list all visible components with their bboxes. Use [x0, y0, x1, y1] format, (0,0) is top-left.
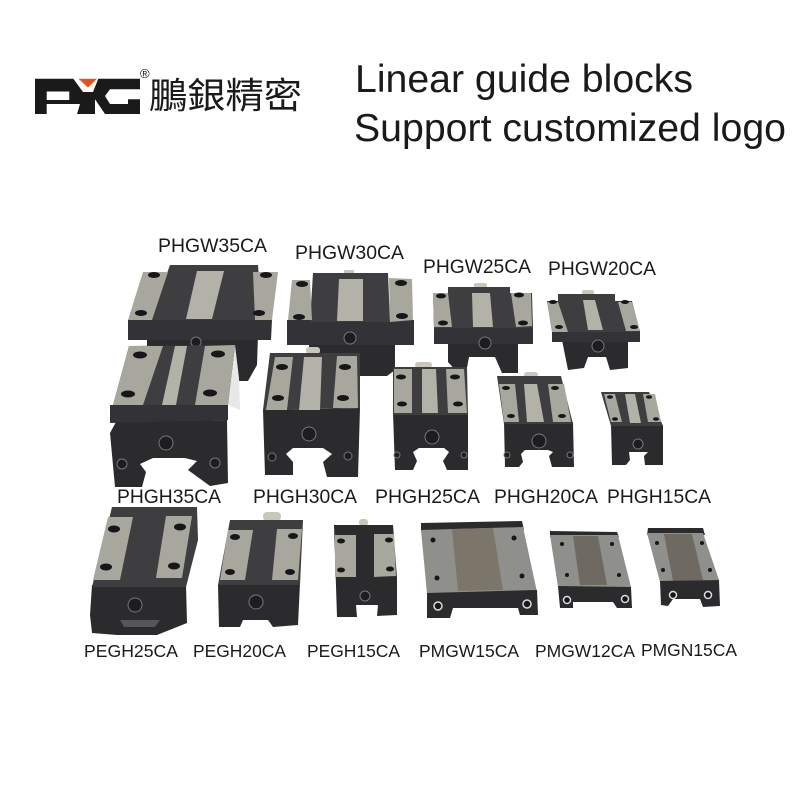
label: PHGH20CA: PHGH20CA [494, 487, 598, 508]
label: PMGN15CA: PMGN15CA [641, 640, 737, 660]
label: PEGH15CA: PEGH15CA [307, 641, 400, 661]
label: PHGW30CA: PHGW30CA [295, 243, 404, 264]
block: PHGW20CA [547, 290, 640, 370]
heading line 1: Linear guide blocks [355, 58, 693, 101]
label: PHGW20CA: PHGW20CA [548, 259, 656, 280]
label: PHGW35CA: PHGW35CA [158, 236, 267, 257]
block: PHGW35CA [128, 265, 278, 381]
heading line 2: Support customized logo [354, 107, 786, 150]
block: PHGH25CA [393, 362, 468, 470]
block: PEGH15CA [334, 519, 397, 617]
label: PHGH15CA: PHGH15CA [607, 487, 711, 508]
block: PHGW25CA [433, 283, 533, 373]
label: PEGH25CA: PEGH25CA [84, 641, 178, 661]
block: PHGH35CA [110, 345, 240, 487]
label: PMGW12CA: PMGW12CA [535, 641, 635, 661]
block: PEGH25CA [90, 507, 198, 635]
block: PEGH20CA [218, 512, 303, 627]
block: PMGW12CA [550, 531, 632, 608]
label: PHGW25CA: PHGW25CA [423, 257, 531, 278]
label: PMGW15CA: PMGW15CA [419, 641, 519, 661]
label: PHGH30CA: PHGH30CA [253, 487, 357, 508]
block: PMGW15CA [421, 521, 538, 618]
logo: PYG mark with company name: 鵬銀精密 [149, 75, 302, 116]
logo: PYG mark with company name [35, 66, 302, 116]
logo: PYG mark with company name: ® [140, 66, 150, 81]
block: PMGN15CA [647, 528, 720, 607]
label: PHGH35CA: PHGH35CA [117, 487, 221, 508]
block: PHGW30CA [287, 270, 414, 376]
block: PHGH15CA [601, 392, 663, 465]
block: PHGH30CA [263, 347, 360, 477]
label: PHGH25CA: PHGH25CA [375, 487, 480, 508]
block: PHGH20CA [497, 372, 574, 467]
label: PEGH20CA: PEGH20CA [193, 641, 286, 661]
